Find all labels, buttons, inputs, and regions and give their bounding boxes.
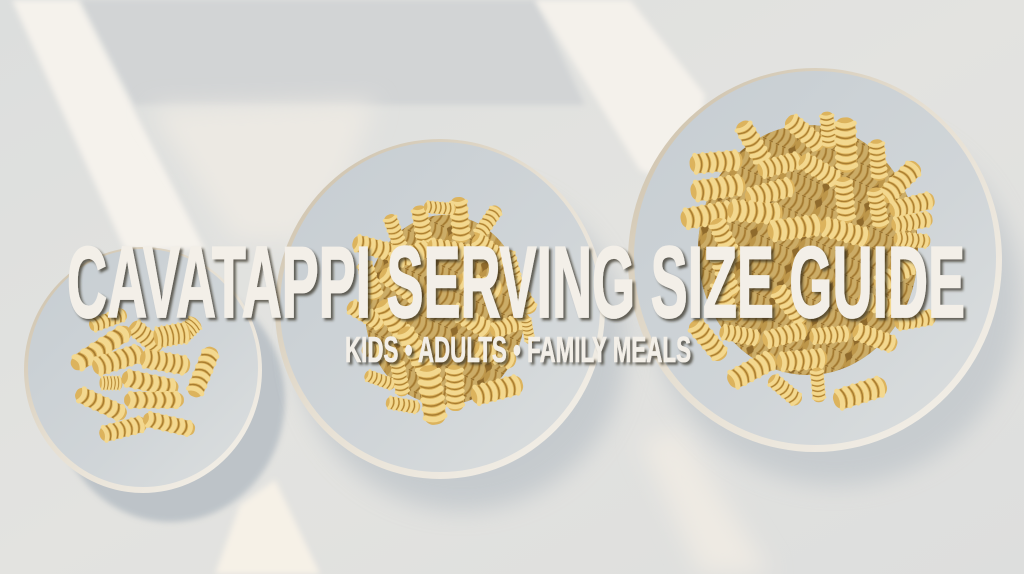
plate: large (family): [628, 68, 1002, 452]
pasta: small portion: [67, 307, 221, 443]
pasta: large portion: [679, 111, 937, 411]
plate shadows: [55, 115, 1020, 522]
plate: small (kids): [24, 247, 262, 493]
plate: medium (adults): [275, 139, 605, 479]
pasta: medium portion: [344, 196, 539, 426]
subtitle: KIDS • ADULTS • FAMILY MEALS: [345, 329, 691, 370]
light and shadow on table: [12, 0, 770, 574]
